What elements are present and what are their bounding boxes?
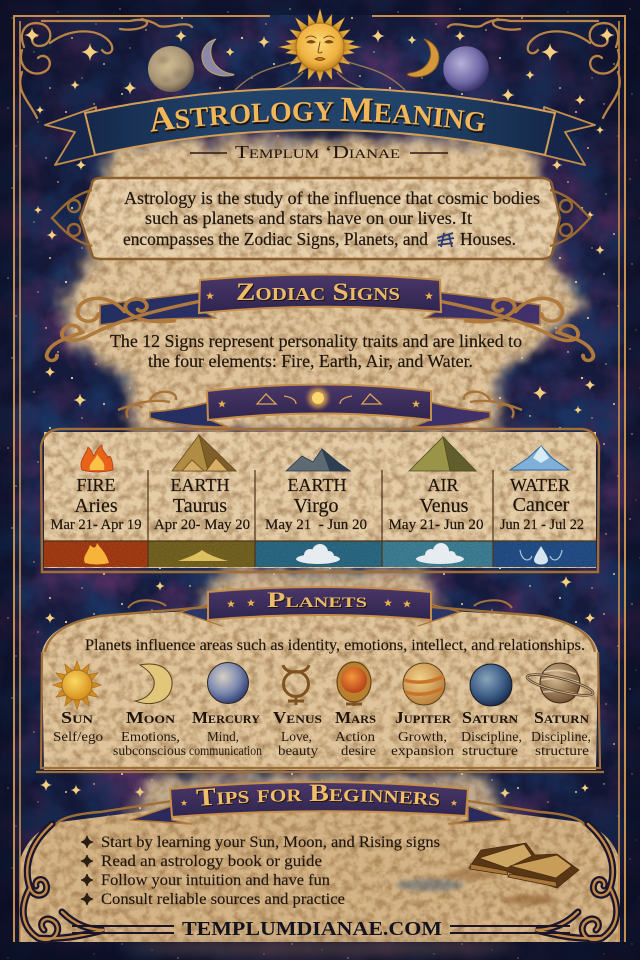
icon: right crescent (408, 39, 439, 77)
tips list: Start by learning your Sun, Moon, and Rising signs (101, 834, 440, 851)
curls (128, 600, 512, 608)
column: earth virgo: EARTH (288, 475, 346, 495)
planet descriptions: communication (189, 744, 262, 759)
icon: sun (52, 660, 102, 710)
tips list: Follow your intuition and have fun (101, 872, 330, 889)
icon: neptune planet (470, 664, 512, 706)
heading: Tips for Beginners (196, 784, 440, 807)
table frame (41, 429, 599, 572)
column: air venus: AIR (428, 475, 458, 495)
planet descriptions: desire (341, 744, 376, 759)
main title: ASTROLOGY MEANING (150, 98, 486, 134)
corner ornaments (20, 19, 620, 118)
icon: olive mountain (409, 437, 476, 471)
panel: zodiac signs table (41, 429, 599, 572)
column: water cancer (500, 475, 584, 533)
element divider banner (118, 384, 522, 427)
icon: mars (337, 662, 371, 706)
intro text: encompasses the Zodiac Signs, Planets, and (123, 229, 428, 249)
banner body (170, 782, 468, 817)
planet descriptions: structure (462, 744, 518, 759)
ribbon tail right (544, 107, 595, 165)
colour band cells (44, 541, 596, 567)
planet names: Jupiter (395, 708, 451, 727)
heading: Zodiac Signs (236, 279, 400, 306)
planet descriptions: Action (335, 730, 375, 745)
title ribbon (44, 87, 596, 166)
planet names: Sun (61, 708, 93, 727)
zodiac description: the four elements: Fire, Earth, Air, and Water. (148, 351, 473, 371)
planet descriptions: Discipline, (531, 730, 591, 745)
planet names: Venus (273, 708, 322, 727)
panel top frame (55, 801, 585, 826)
ribbon sides (150, 402, 490, 427)
icon: central glow sun (308, 388, 328, 408)
flourishes (118, 392, 522, 418)
icon: purple planet (443, 46, 489, 92)
column: water cancer: Jun 21 - Jul 22 (500, 517, 584, 533)
planet descriptions: Discipline, (461, 730, 522, 745)
column: air venus: Venus (420, 495, 469, 517)
planet descriptions: Mind, (207, 730, 239, 745)
panel frame (80, 178, 560, 259)
right flourish (550, 190, 590, 246)
right ornament (536, 824, 617, 940)
icon: left crescent (202, 39, 234, 76)
planet descriptions: Self/ego (53, 730, 103, 745)
zodiac description (110, 331, 522, 371)
column: earth taurus: Apr 20- May 20 (154, 517, 250, 533)
column: earth taurus (154, 475, 250, 533)
zodiac description: The 12 Signs represent personality traits and are linked to (110, 331, 522, 351)
icon: saturn (525, 663, 595, 703)
website url: TEMPLUMDIANAE.COM (182, 918, 442, 940)
column: earth taurus: Taurus (173, 495, 227, 517)
ribbon tail left (45, 107, 96, 165)
planets description: Planets influence areas such as identity, emotions, intellect, and relationships. (85, 637, 585, 654)
icon: band sand mound (178, 550, 228, 561)
star field sparkles (34, 29, 605, 798)
column: air venus (388, 475, 484, 533)
panel: tips for beginners (20, 781, 620, 944)
intro text (123, 188, 540, 249)
planet descriptions: structure (535, 744, 589, 759)
decorative vines under the sun (235, 60, 405, 106)
bullets (81, 836, 93, 905)
banner body (199, 274, 441, 313)
icon: sun with face (279, 9, 361, 82)
planet descriptions: beauty (278, 744, 318, 759)
section banner: planets (45, 587, 595, 652)
icon: slate mountains (286, 449, 350, 471)
column: fire aries: Mar 21- Apr 19 (50, 517, 142, 533)
icon: fire (81, 445, 113, 472)
column: water cancer: WATER (510, 475, 570, 495)
column: earth virgo: Virgo (293, 495, 339, 517)
banner body (208, 587, 431, 620)
column: earth taurus: EARTH (171, 475, 229, 495)
tips list: Read an astrology book or guide (101, 853, 322, 870)
planet descriptions: Love, (281, 730, 312, 745)
icon: band water drop (520, 546, 562, 564)
left ornament (23, 824, 104, 940)
bottom blurred glow (120, 940, 520, 956)
planet names: Mercury (192, 708, 260, 727)
planet names: Moon (126, 708, 175, 727)
planet descriptions: Growth, (398, 730, 447, 745)
tips list: Consult reliable sources and practice (101, 891, 345, 908)
map smudges (396, 870, 558, 905)
planet descriptions: subconscious (113, 744, 186, 759)
icon: jupiter (403, 663, 445, 705)
heading: Planets (267, 587, 367, 612)
column: water cancer: Cancer (513, 494, 570, 516)
ribbon sides (180, 604, 460, 626)
ribbon sides (100, 292, 540, 325)
column: earth virgo: May 21 - Jun 20 (265, 517, 367, 533)
parchment backdrops (20, 140, 620, 942)
ribbon body (85, 88, 555, 155)
icon: water crystal (510, 446, 569, 470)
banner body (207, 384, 431, 420)
left flourish (47, 298, 200, 360)
icon: full moon (148, 46, 194, 92)
tips list (101, 834, 440, 908)
intro text: Astrology is the study of the influence that cosmic bodies (124, 188, 540, 208)
icon: gold mountains (172, 435, 236, 471)
panel: planets (36, 637, 604, 772)
column: air venus: May 21- Jun 20 (388, 517, 484, 533)
panel frame (36, 652, 604, 772)
subtitle: Templum ‘Dianae (235, 142, 400, 162)
planet descriptions: expansion (391, 744, 454, 759)
panel: intro (52, 178, 590, 259)
planet names: Saturn (534, 708, 589, 727)
icon: band flame (84, 543, 109, 564)
section banner: zodiac signs (47, 274, 593, 360)
column: fire aries: Aries (74, 495, 118, 517)
planet names (61, 708, 589, 727)
intro text: Houses. (460, 229, 516, 249)
icon: band cloud (296, 544, 340, 564)
intro text: such as planets and stars have on our lives. It (145, 208, 472, 228)
column: fire aries: FIRE (76, 475, 116, 495)
column: fire aries (50, 475, 142, 533)
left flourish (52, 190, 92, 246)
planet descriptions (53, 730, 591, 759)
planet descriptions: Emotions, (121, 730, 180, 745)
icon: moon (135, 664, 172, 704)
icon: venus glyph (283, 665, 309, 705)
planet names: Mars (335, 708, 376, 727)
banner frame (45, 607, 595, 652)
planet names: Saturn (462, 708, 518, 727)
right flourish (440, 298, 593, 360)
icon: houses glyph (437, 233, 454, 247)
icon: band cloud 2 (416, 543, 464, 564)
icon: mercury planet (208, 662, 248, 704)
column: earth virgo (265, 475, 367, 533)
banner ribbon sides (130, 806, 510, 824)
icon: open book (469, 843, 579, 888)
